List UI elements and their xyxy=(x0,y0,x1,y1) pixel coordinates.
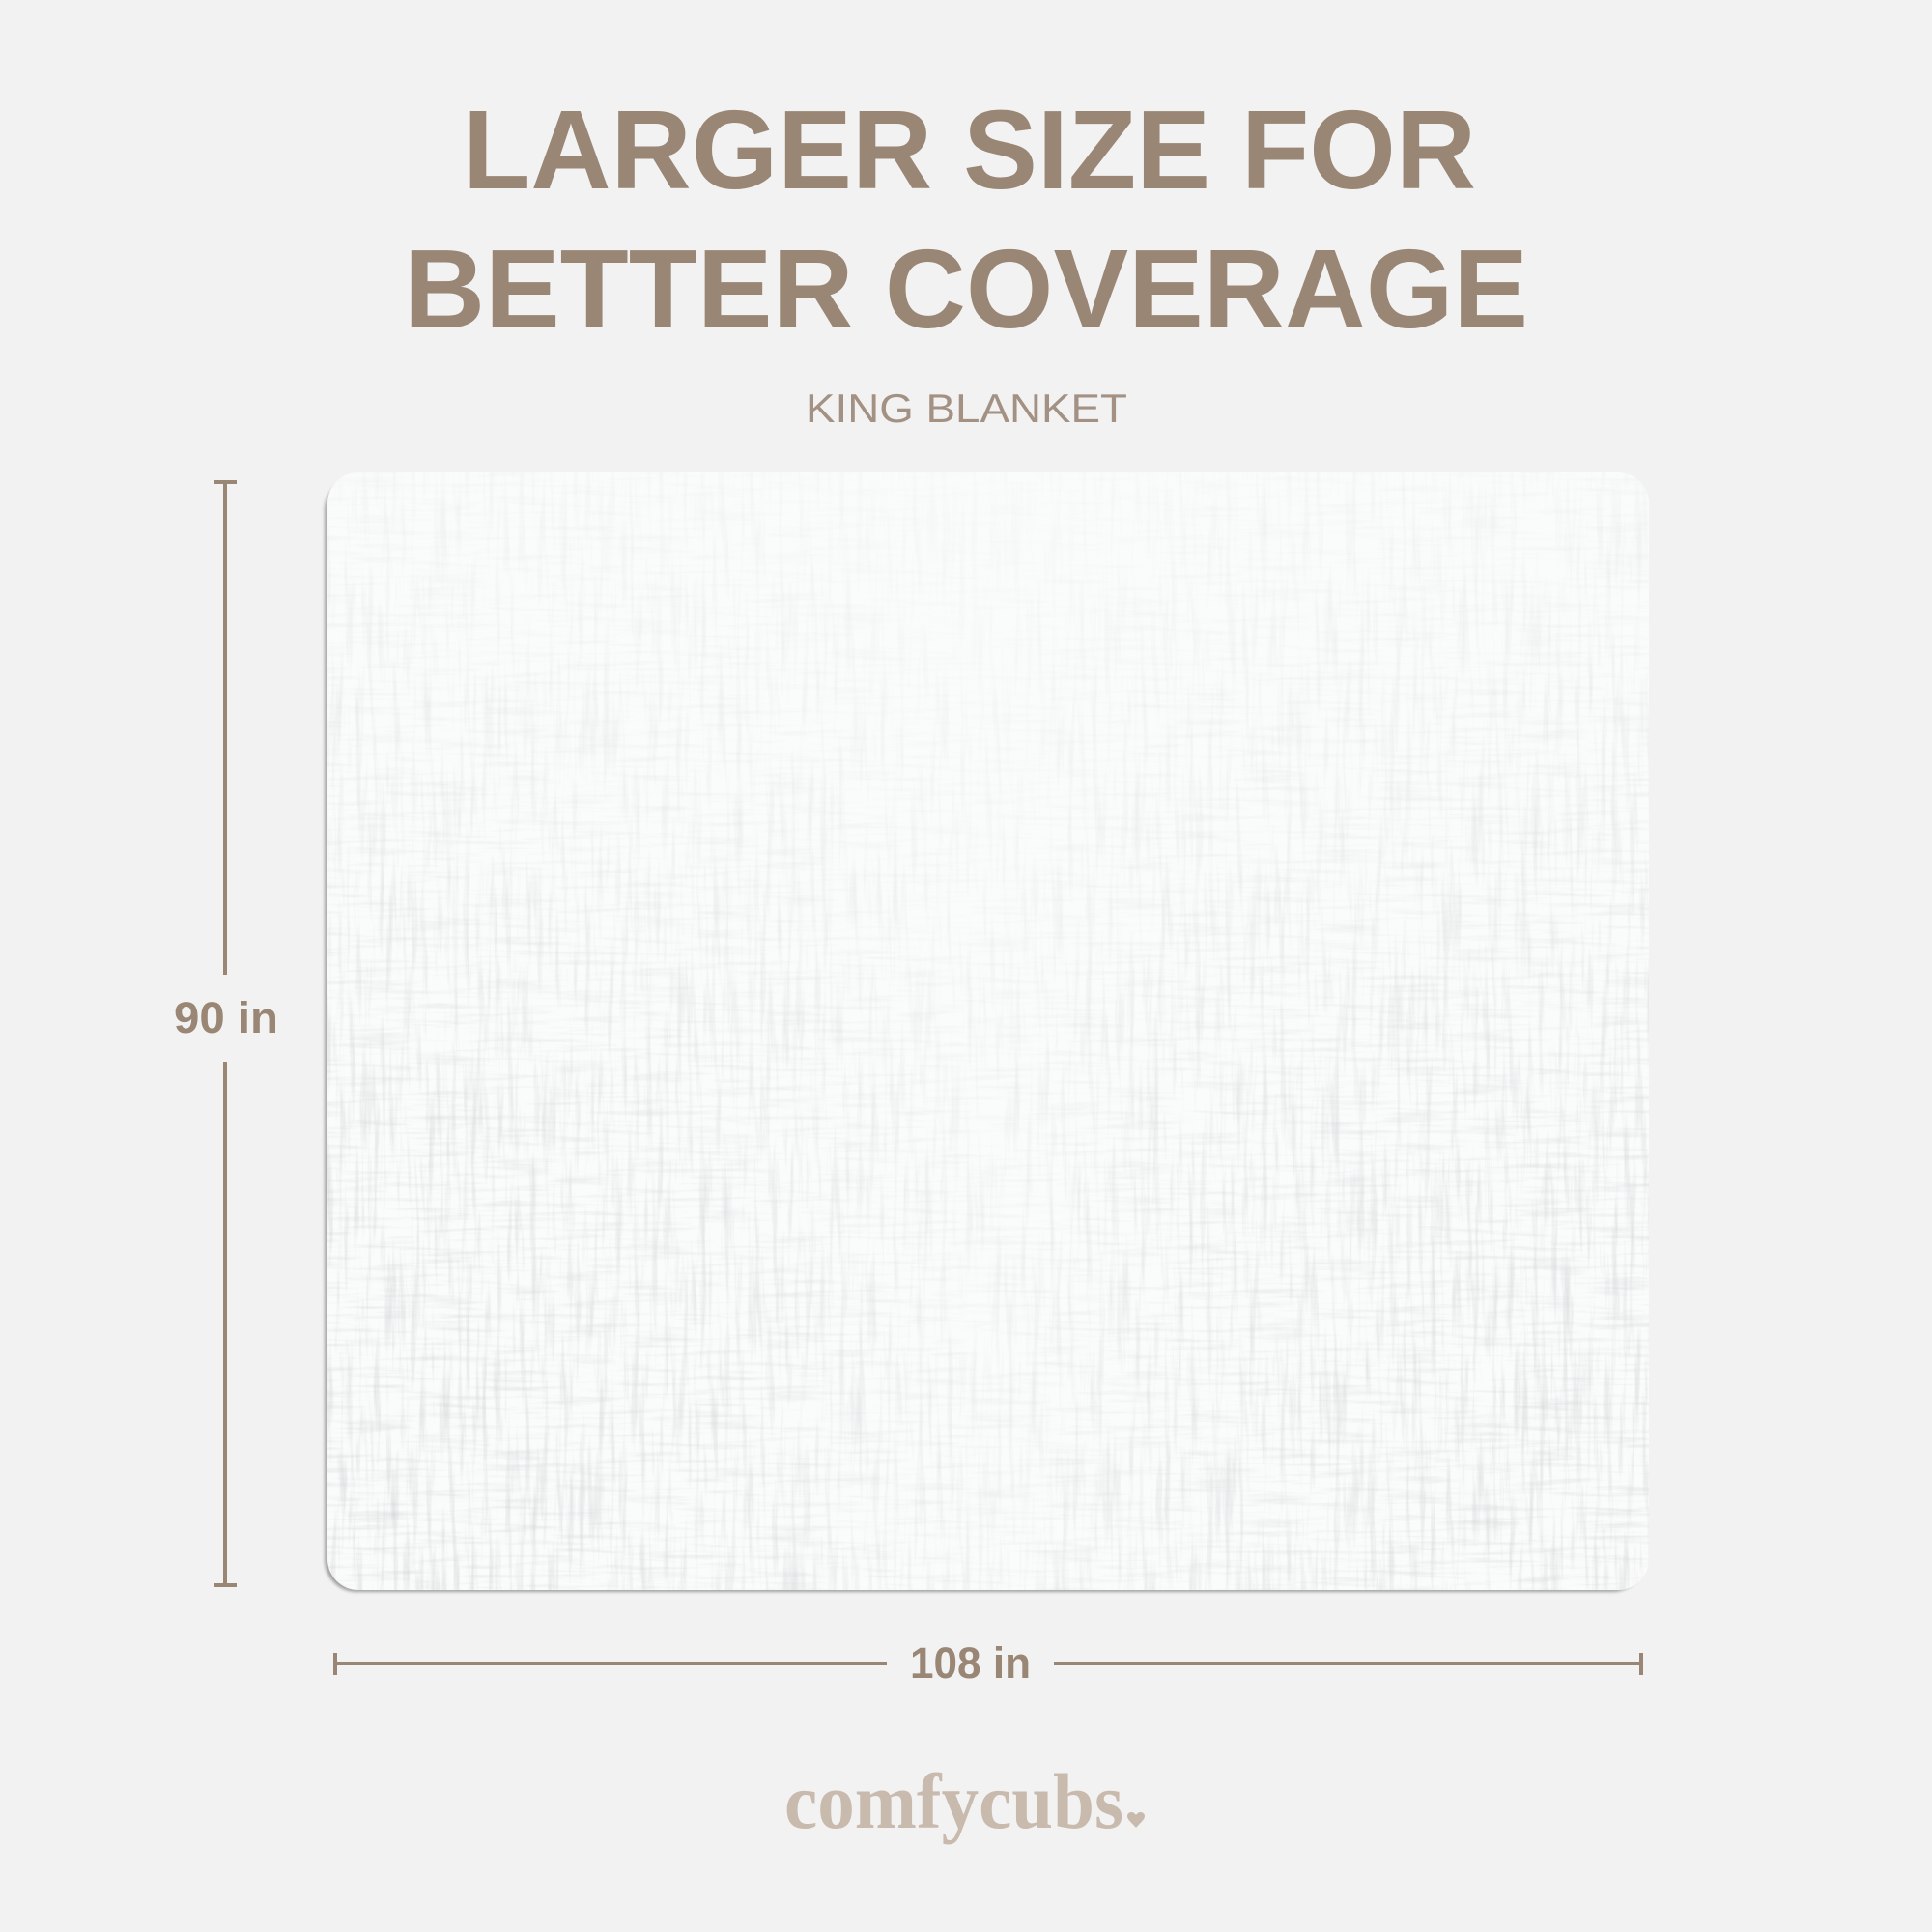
blanket swatch xyxy=(325,472,1649,1592)
logo: comfycubs: comfycubs xyxy=(784,1757,1123,1845)
title xyxy=(404,87,1528,352)
title: LARGER SIZE FOR xyxy=(463,87,1476,213)
subtitle: king blanket: KING BLANKET xyxy=(806,385,1127,431)
height label: 90 in: 90 in xyxy=(174,993,278,1042)
width dimension line xyxy=(333,1653,1643,1675)
height dimension line xyxy=(214,480,237,1587)
icon: heart xyxy=(1127,1812,1145,1828)
title: BETTER COVERAGE xyxy=(404,226,1528,352)
width label: 108 in: 108 in xyxy=(910,1638,1031,1688)
